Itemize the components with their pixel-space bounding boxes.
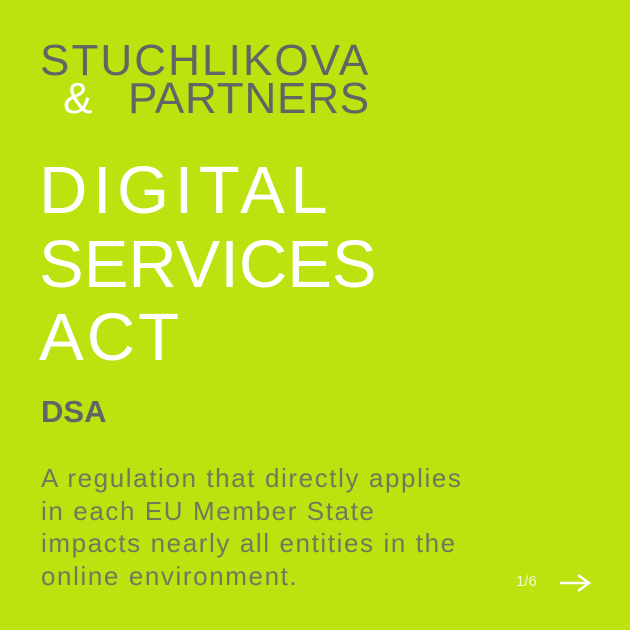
title: SERVICES bbox=[39, 227, 377, 302]
subtitle: DSA: DSA bbox=[41, 394, 106, 429]
logo bbox=[40, 36, 370, 123]
icon: arrow bbox=[560, 574, 591, 592]
body text: impacts nearly all entities in the bbox=[41, 528, 457, 558]
logo: & bbox=[63, 74, 92, 123]
body text: online environment. bbox=[41, 561, 298, 591]
title bbox=[39, 153, 377, 375]
body text: in each EU Member State bbox=[41, 496, 376, 526]
title: DIGITAL bbox=[39, 153, 333, 228]
logo: STUCHLIKOVA bbox=[40, 36, 370, 85]
body text bbox=[41, 463, 463, 591]
body text: A regulation that directly applies bbox=[41, 463, 463, 493]
logo: PARTNERS bbox=[128, 74, 370, 123]
page counter: 1/6 bbox=[516, 573, 537, 590]
title: ACT bbox=[39, 300, 182, 375]
